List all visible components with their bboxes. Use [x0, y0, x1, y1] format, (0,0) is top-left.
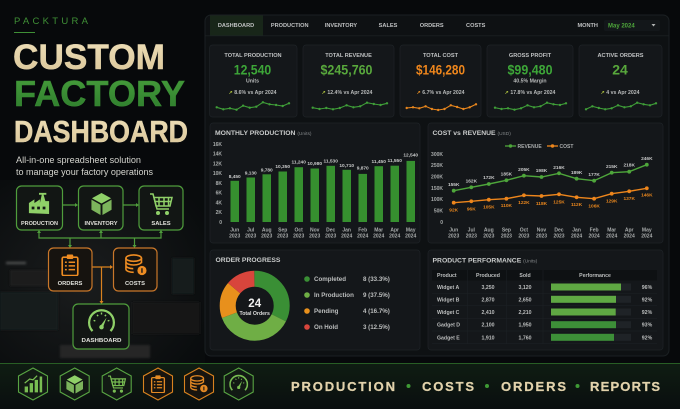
table header: Product: [437, 273, 457, 279]
month axis labels: 2023: [536, 234, 547, 240]
table rows: 92%: [642, 297, 653, 303]
KPI card: total revenue: [303, 45, 394, 117]
table rows: 92%: [642, 335, 653, 341]
donut chart: [228, 279, 282, 333]
KPI card: active orders: ACTIVE ORDERS: [598, 53, 644, 59]
month axis labels: Apr: [625, 228, 634, 234]
workflow connectors: orange: [92, 265, 113, 304]
table rows: Gadget D: [437, 323, 460, 329]
KPI card: active orders: ↗ 4 vs Apr 2024: [600, 90, 640, 96]
month axis labels: Jan: [342, 228, 351, 234]
cost value labels: 129K: [606, 199, 618, 205]
month axis labels: 2023: [277, 234, 288, 240]
donut legend: 9 (37.5%): [363, 292, 390, 299]
KPI card: gross profit: 40.5% Margin: [513, 79, 547, 85]
chart legend: [505, 144, 573, 150]
navigation tabs: SALES: [379, 23, 398, 29]
y axis labels: 16K: [213, 142, 222, 148]
month axis labels: Sep: [278, 228, 287, 234]
brand name: PACKTURA: [14, 16, 89, 27]
icon: chart hexagon: [18, 368, 48, 400]
flow box: orders: [48, 248, 92, 291]
cost value labels: 122K: [518, 200, 530, 206]
table rows: 1,910: [482, 335, 495, 341]
cost value labels: 96K: [467, 206, 476, 212]
flow box: costs: [114, 248, 157, 291]
month axis labels: Mar: [374, 228, 383, 234]
heading: product performance: PRODUCT PERFORMANCE (Units): [432, 258, 538, 264]
y axis labels: [213, 142, 222, 226]
KPI card: total cost: ↗ 6.7% vs Apr 2024: [416, 90, 465, 96]
month axis labels: 2023: [325, 234, 336, 240]
flow box: production: [16, 186, 62, 230]
cost value labels: 106K: [588, 204, 600, 210]
donut centre label: [239, 298, 270, 317]
revenue value labels: [448, 156, 653, 188]
table rows: 3,120: [519, 285, 532, 291]
bar value labels: 9,780: [261, 167, 273, 173]
table header: [432, 270, 657, 280]
revenue value labels: 215K: [606, 164, 618, 170]
heading: cost vs revenue: COST vs REVENUE (USD): [432, 130, 511, 137]
bar value labels: 12,540: [403, 152, 418, 158]
cost value labels: 105K: [483, 204, 495, 210]
month axis labels: Jul: [468, 228, 476, 234]
KPI card: total production: Units: [246, 79, 259, 85]
table rows: 2,650: [519, 297, 532, 303]
month axis labels: Feb: [358, 228, 367, 234]
month axis labels: 2023: [245, 234, 256, 240]
title: [13, 38, 188, 149]
performance bars: [551, 284, 631, 341]
y axis labels: 50K: [434, 208, 443, 214]
month axis labels: Nov: [537, 228, 546, 234]
cost value labels: 118K: [536, 201, 548, 207]
KPI card: active orders: [579, 45, 662, 117]
bar chart: [230, 161, 415, 222]
month axis labels: 2024: [571, 234, 582, 240]
y axis labels: 10K: [213, 171, 222, 177]
cost value labels: 110K: [501, 203, 513, 209]
month axis labels: May: [642, 228, 652, 234]
month axis labels: 2023: [501, 234, 512, 240]
month selector: May 2024: [608, 24, 635, 30]
title: FACTORY: [14, 73, 185, 114]
icon: cart hexagon: [102, 368, 131, 400]
title: DASHBOARD: [14, 115, 188, 149]
icon: gauge hexagon: [224, 368, 253, 400]
heading: order progress: ORDER PROGRESS: [216, 257, 281, 264]
panel: product performance: [428, 250, 663, 350]
table rows: 1,950: [519, 323, 532, 329]
month axis labels: 2023: [261, 234, 272, 240]
revenue line: [452, 163, 649, 193]
icon: coins hexagon: [184, 368, 214, 400]
cost line: [452, 186, 649, 205]
cost value labels: 146K: [641, 193, 653, 199]
KPI card: total cost: TOTAL COST: [423, 53, 459, 59]
y axis labels: [431, 152, 443, 226]
month axis labels: 2024: [405, 234, 416, 240]
KPI card: total cost: $146,280: [416, 61, 465, 77]
month axis labels: Dec: [326, 228, 335, 234]
month axis labels: 2023: [466, 234, 477, 240]
title: CUSTOM: [13, 38, 165, 77]
bar value labels: 11,530: [323, 158, 338, 164]
y axis labels: 0: [219, 220, 222, 226]
bar value labels: 9,870: [357, 166, 369, 172]
y axis labels: 0: [440, 220, 443, 226]
month axis labels: Feb: [590, 228, 599, 234]
cost value labels: 92K: [449, 208, 459, 214]
month axis labels: Jan: [572, 228, 581, 234]
month selector: [577, 20, 660, 31]
revenue value labels: 218K: [623, 162, 635, 168]
workflow connectors: green: [37, 203, 163, 248]
donut legend: Completed: [314, 276, 346, 283]
y axis labels: 150K: [431, 186, 443, 192]
KPI card: gross profit: ↗ 17.8% vs Apr 2024: [505, 90, 556, 96]
footer tagline: REPORTS: [590, 379, 660, 394]
KPI card: gross profit: $99,480: [508, 61, 553, 77]
navigation tabs: ORDERS: [420, 23, 444, 29]
panel: monthly production: [210, 123, 420, 243]
flow box: orders: ORDERS: [58, 281, 83, 287]
icon: cube hexagon: [60, 368, 89, 400]
table header: Produced: [476, 273, 500, 279]
factory background scene: [0, 180, 205, 363]
KPI card: total revenue: TOTAL REVENUE: [325, 53, 372, 59]
donut centre label: 24: [248, 298, 262, 310]
table rows: 92%: [642, 310, 653, 316]
table rows: Widget B: [437, 297, 460, 303]
month axis labels: 2023: [309, 234, 320, 240]
month axis labels: Nov: [310, 228, 320, 234]
footer tagline: COSTS: [422, 379, 474, 394]
table rows: Widget A: [437, 285, 459, 291]
month axis labels: 2024: [357, 234, 368, 240]
month axis labels: Oct: [520, 228, 528, 234]
footer tagline: ORDERS: [501, 379, 566, 394]
y axis labels: 250K: [431, 163, 443, 169]
month axis labels: 2024: [641, 234, 653, 240]
table rows: [432, 270, 657, 344]
bar value labels: 11,240: [291, 160, 306, 166]
cost value labels: 137K: [623, 196, 635, 202]
bar value labels: 10,710: [339, 163, 354, 169]
navigation tabs: COSTS: [466, 23, 486, 29]
month axis labels: 2024: [624, 234, 635, 240]
subtitle: [16, 155, 154, 177]
subtitle: All-in-one spreadsheet solution: [16, 155, 141, 165]
donut legend: 8 (33.3%): [363, 276, 390, 283]
revenue value labels: 198K: [536, 168, 548, 174]
month axis labels: Jul: [247, 228, 255, 234]
navigation tabs: INVENTORY: [325, 23, 357, 29]
revenue value labels: 155K: [448, 182, 460, 188]
dashboard panel: [205, 15, 669, 356]
revenue value labels: 246K: [641, 156, 653, 162]
bar value labels: 8,450: [229, 174, 241, 180]
donut legend: Pending: [314, 308, 339, 315]
month axis labels: Apr: [390, 228, 399, 234]
table rows: 3,250: [482, 285, 495, 291]
flow box: dashboard: DASHBOARD: [82, 338, 122, 344]
y axis labels: 300K: [431, 152, 443, 158]
cost value labels: 112K: [571, 202, 583, 208]
month axis labels: Aug: [484, 228, 494, 234]
month selector: MONTH: [577, 23, 598, 29]
KPI card: total production: ↗ 8.6% vs Apr 2024: [228, 90, 277, 96]
bar value labels: [229, 152, 418, 180]
navigation tabs: [210, 16, 486, 36]
heading: monthly production: MONTHLY PRODUCTION (Units): [215, 130, 312, 137]
subtitle: to manage your factory operations: [16, 167, 154, 177]
donut legend: 4 (16.7%): [363, 308, 390, 315]
month axis labels: May: [406, 228, 416, 234]
table rows: 1,760: [519, 335, 532, 341]
table rows: 2,870: [482, 297, 495, 303]
month axis labels: Sep: [502, 228, 511, 234]
flow box: costs: COSTS: [125, 281, 145, 287]
month axis labels: 2023: [553, 234, 565, 240]
flow box: production: PRODUCTION: [21, 221, 58, 227]
chart legend: COST: [560, 144, 573, 150]
flow box: inventory: INVENTORY: [84, 221, 118, 227]
month axis labels: 2023: [293, 234, 304, 240]
footer tagline: [291, 379, 660, 394]
month axis labels: Jun: [449, 228, 458, 234]
month axis labels: Aug: [262, 228, 272, 234]
footer band: [0, 363, 680, 409]
month axis labels: 2023: [229, 234, 240, 240]
bar value labels: 10,350: [275, 164, 290, 170]
month axis labels: Jun: [230, 228, 239, 234]
flow box: dashboard: [73, 304, 129, 349]
KPI card: total revenue: $245,760: [320, 61, 373, 77]
y axis labels: 8K: [216, 181, 222, 187]
month axis labels: 2024: [606, 234, 617, 240]
month axis labels: 2023: [448, 234, 459, 240]
revenue value labels: 172K: [483, 175, 495, 181]
flow box: sales: [139, 186, 183, 230]
donut legend: In Production: [314, 292, 354, 299]
month axis labels: Oct: [295, 228, 303, 234]
table header: Sold: [519, 273, 531, 279]
brand underline: [14, 32, 35, 33]
month axis labels: [229, 228, 416, 240]
table rows: Gadget E: [437, 335, 460, 341]
revenue value labels: 189K: [571, 170, 583, 176]
y axis labels: 200K: [431, 174, 443, 180]
bar value labels: 10,980: [307, 161, 322, 167]
KPI card: active orders: 24: [612, 61, 628, 77]
y axis labels: 100K: [431, 197, 443, 203]
table rows: 96%: [642, 285, 653, 291]
table rows: 2,210: [519, 310, 532, 316]
y axis labels: 12K: [213, 161, 222, 167]
month axis labels: [448, 228, 653, 240]
cost value labels: [449, 193, 653, 214]
flow box: inventory: [78, 186, 123, 230]
revenue value labels: 205K: [518, 167, 530, 173]
month axis labels: 2024: [589, 234, 600, 240]
bar value labels: 11,550: [387, 158, 402, 164]
KPI card: total production: TOTAL PRODUCTION: [224, 53, 282, 59]
flow box: sales: SALES: [151, 221, 171, 227]
y axis labels: 6K: [216, 190, 222, 196]
chart legend: REVENUE: [518, 144, 542, 150]
month axis labels: 2024: [373, 234, 384, 240]
table rows: Widget C: [437, 310, 460, 316]
footer tagline: PRODUCTION: [291, 379, 395, 394]
navigation tabs: DASHBOARD: [218, 23, 254, 29]
table rows: 2,100: [482, 323, 495, 329]
y axis labels: 4K: [216, 200, 222, 206]
KPI card: total production: 12,540: [234, 61, 271, 77]
bar value labels: 9,130: [245, 170, 257, 176]
month axis labels: Dec: [554, 228, 564, 234]
icon: clipboard hexagon: [144, 368, 172, 400]
KPI card: total cost: [400, 45, 481, 117]
KPI card: gross profit: [487, 45, 573, 117]
donut centre label: Total Orders: [239, 311, 270, 317]
navigation tabs: PRODUCTION: [271, 23, 309, 29]
revenue value labels: 162K: [466, 178, 478, 184]
y axis labels: 14K: [213, 152, 222, 158]
donut legend: [304, 276, 390, 331]
table rows: 93%: [642, 323, 653, 329]
table header: Performance: [579, 273, 611, 279]
KPI card: gross profit: GROSS PROFIT: [509, 53, 552, 59]
y axis labels: 2K: [216, 210, 222, 216]
donut legend: 3 (12.5%): [363, 324, 390, 331]
cost value labels: 125K: [553, 199, 565, 205]
month axis labels: 2024: [341, 234, 352, 240]
panel: order progress: [210, 250, 420, 350]
revenue value labels: 185K: [501, 172, 513, 178]
month axis labels: 2023: [518, 234, 530, 240]
revenue value labels: 216K: [553, 165, 565, 171]
KPI card: total revenue: ↗ 12.4% vs Apr 2024: [322, 90, 373, 96]
month axis labels: 2024: [389, 234, 400, 240]
donut legend: On Hold: [314, 324, 338, 331]
table rows: 2,410: [482, 310, 495, 316]
KPI card: total production: [210, 45, 297, 117]
month axis labels: 2023: [483, 234, 495, 240]
panel: cost vs revenue: [428, 123, 663, 243]
revenue value labels: 177K: [588, 172, 600, 178]
bar value labels: 11,450: [371, 159, 386, 165]
month axis labels: Mar: [607, 228, 616, 234]
